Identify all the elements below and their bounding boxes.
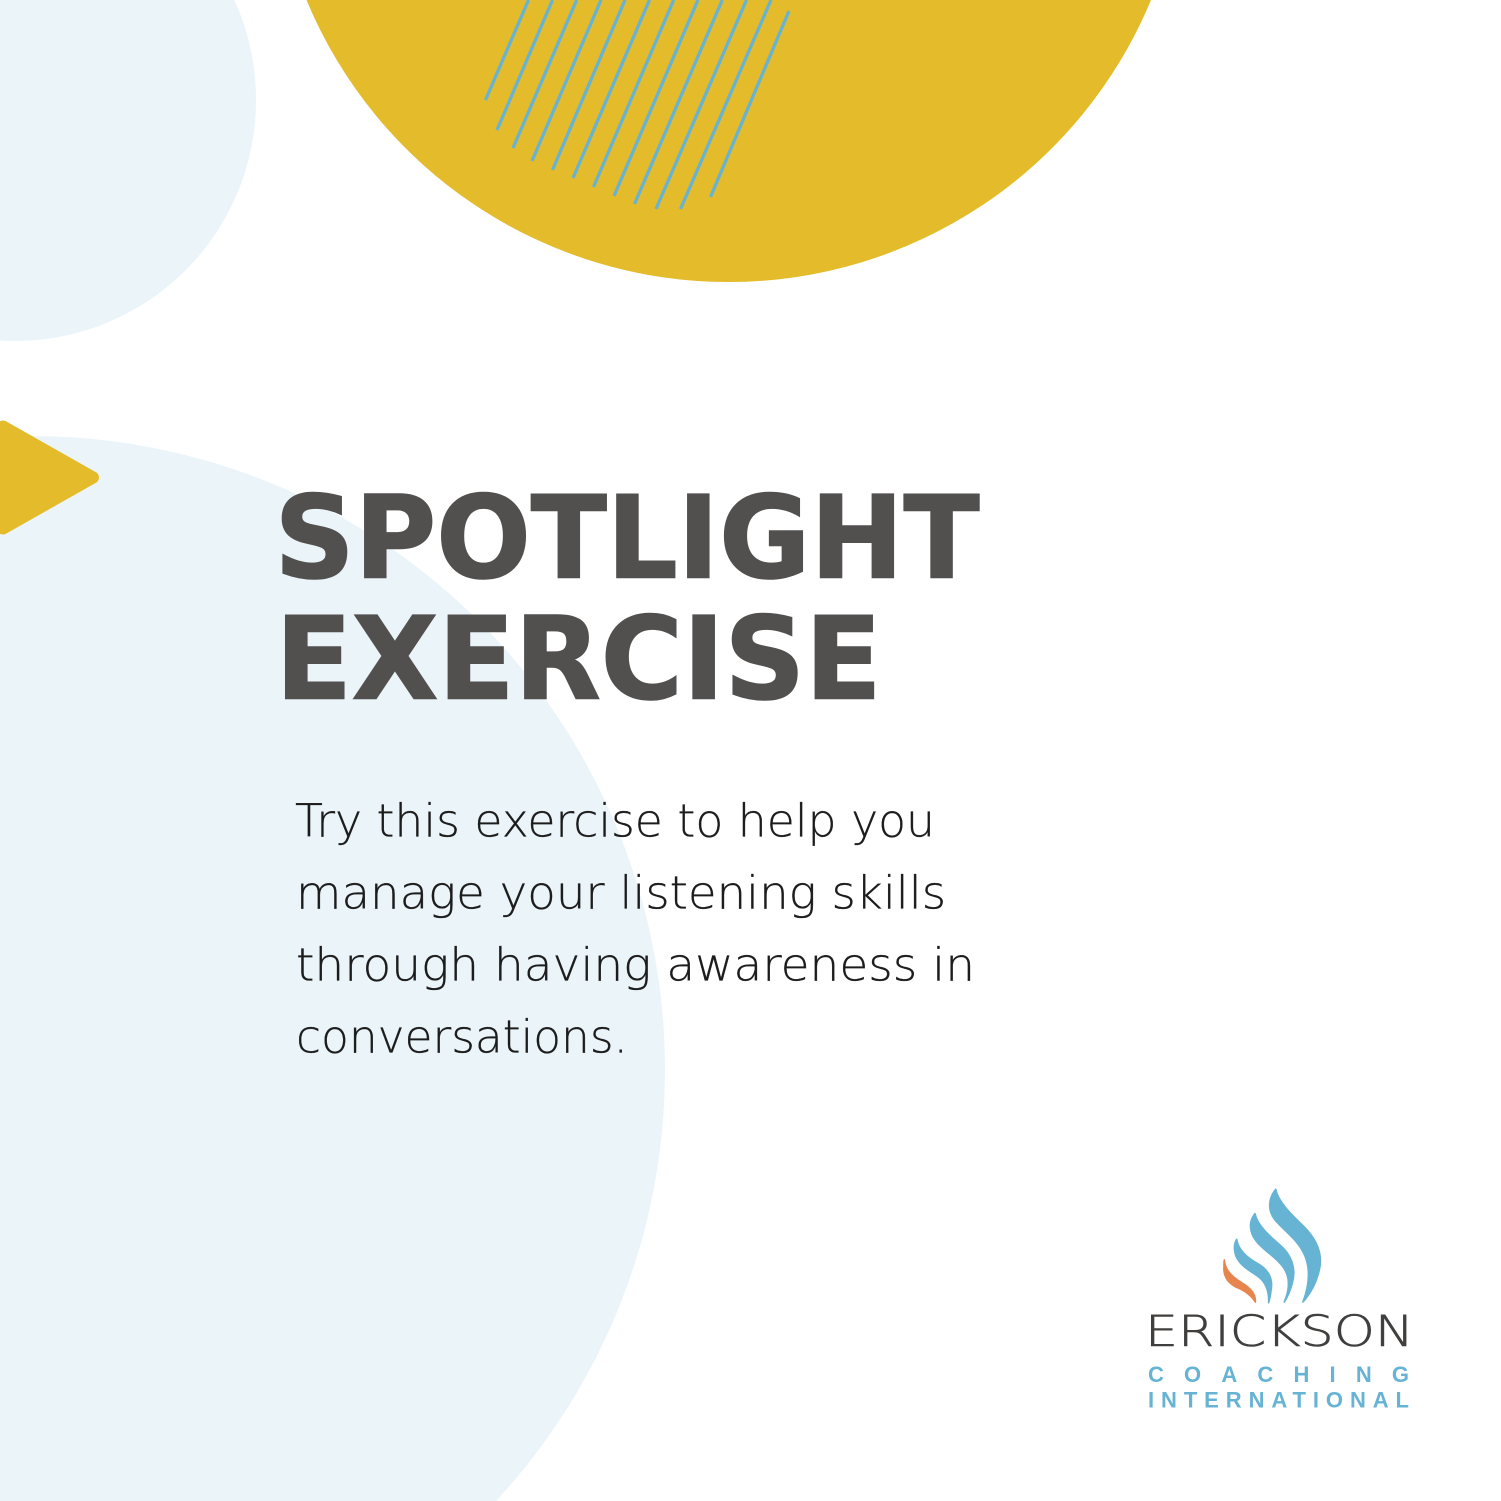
title: SPOTLIGHT (274, 472, 980, 605)
top yellow circle (306, 0, 1151, 282)
intro paragraph: conversations. (296, 1010, 628, 1064)
icon: flame (1224, 1189, 1320, 1303)
blue diagonal hatch lines (486, 0, 789, 209)
wordmark: Erickson: ERICKSON (1145, 1307, 1414, 1357)
intro paragraph: Try this exercise to help you (295, 794, 935, 848)
wordmark: International: INTERNATIONAL (1148, 1388, 1409, 1412)
intro paragraph: through having awareness in (296, 938, 975, 992)
large pale blue circle (0, 436, 665, 1501)
title: EXERCISE (276, 593, 882, 726)
title (274, 472, 980, 726)
yellow triangle marker (3, 426, 93, 528)
intro paragraph (295, 794, 975, 1064)
top-left pale blue circle (0, 0, 256, 341)
intro paragraph: manage your listening skills (296, 866, 946, 920)
wordmark: Coaching: COACHING (1148, 1362, 1409, 1387)
logo: Erickson Coaching International (1145, 1189, 1414, 1412)
